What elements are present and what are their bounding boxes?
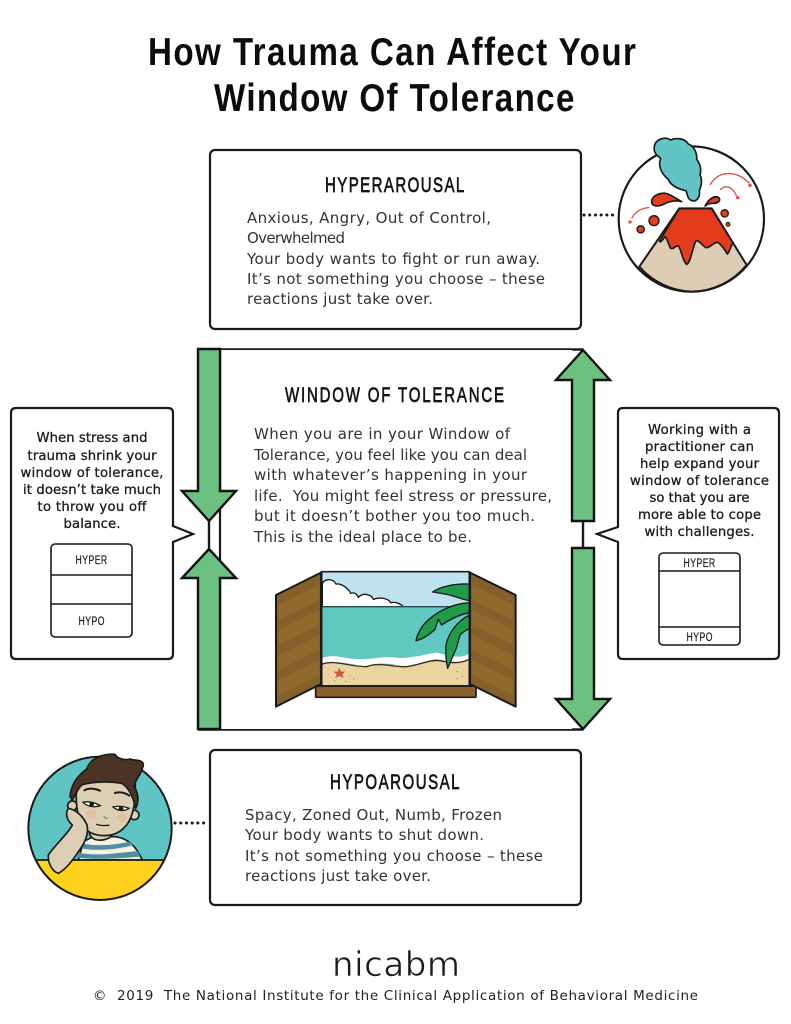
heading: hyperarousal: HYPERAROUSAL — [325, 172, 464, 197]
callout: expand — [597, 408, 779, 659]
illustration: window with beach view — [276, 572, 516, 707]
mini window: narrow — [51, 544, 132, 637]
text: window of tolerance description: life. You might feel stress or pressure, — [254, 487, 552, 505]
text: hypoarousal description: Spacy, Zoned Out, Numb, Frozen — [245, 806, 502, 824]
panel: hypoarousal — [210, 750, 581, 905]
callout: shrink — [11, 408, 193, 659]
heading: hypoarousal: HYPOAROUSAL — [330, 769, 460, 794]
hair — [70, 754, 143, 808]
text: hypoarousal description: reactions just take over. — [245, 867, 431, 885]
text: hyperarousal description: Anxious, Angry, Out of Control, — [247, 209, 491, 227]
text: hyperarousal description: Your body wants to fight or run away. — [246, 250, 540, 268]
volcano mountain — [639, 208, 747, 292]
window sill — [316, 686, 476, 697]
clouds — [322, 580, 403, 607]
sky — [322, 572, 469, 607]
text: hypoarousal description: Your body wants to shut down. — [244, 826, 484, 844]
table — [37, 860, 163, 899]
neck — [89, 830, 113, 840]
callout text: shrink: it doesn’t take much — [23, 483, 161, 498]
surf — [322, 653, 469, 666]
logo: nicabm — [332, 945, 460, 985]
mini window: wide: HYPER — [684, 558, 716, 570]
text: hyperarousal description: reactions just take over. — [247, 290, 433, 308]
arm and hand — [48, 808, 88, 873]
panel: hyperarousal — [210, 150, 581, 329]
panel: window of tolerance — [198, 350, 583, 730]
shirt — [78, 837, 142, 860]
text: hyperarousal description — [246, 209, 545, 308]
title: How Trauma Can Affect Your — [148, 29, 636, 74]
callout text: expand — [630, 423, 769, 540]
volcano lava — [659, 209, 733, 264]
mini window: narrow: HYPER — [76, 555, 108, 567]
starfish — [333, 668, 345, 678]
left shutter — [276, 573, 321, 707]
title — [148, 29, 636, 120]
text: hyperarousal description: It’s not something you choose – these — [247, 270, 545, 288]
text: window of tolerance description: When you are in your Window of — [254, 425, 511, 443]
smoke cloud — [654, 138, 701, 201]
face — [83, 789, 129, 826]
callout text: shrink: When stress and — [36, 431, 148, 446]
callout text: expand: more able to cope — [638, 508, 761, 523]
ears — [68, 801, 77, 810]
callout text: expand: window of tolerance — [630, 474, 769, 489]
text: hypoarousal description — [244, 806, 543, 885]
text: window of tolerance description: with whatever’s happening in your — [254, 466, 528, 484]
callout text: expand: with challenges. — [644, 525, 754, 540]
arrows: shrinking window (left) — [182, 349, 236, 729]
connector: boy to hypoarousal — [175, 822, 209, 824]
callout text: shrink: balance. — [64, 517, 120, 532]
arrows: expanding window (right) — [556, 350, 610, 729]
text: window of tolerance description: This is the ideal place to be. — [253, 528, 472, 546]
icon: volcano — [619, 138, 764, 292]
callout text: expand: practitioner can — [645, 440, 754, 455]
callout text: shrink: to throw you off — [38, 500, 147, 515]
title: Window Of Tolerance — [214, 75, 574, 120]
sea — [322, 607, 469, 665]
callout text: expand: help expand your — [640, 457, 760, 472]
mini window: narrow: HYPO — [78, 616, 104, 628]
head — [76, 778, 135, 836]
text: hypoarousal description: It’s not something you choose – these — [245, 847, 543, 865]
callout text: shrink — [20, 431, 164, 532]
text: hyperarousal description: Overwhelmed — [247, 229, 345, 247]
connector: hyperarousal to volcano — [584, 214, 617, 216]
icon: bored boy — [25, 754, 175, 903]
text: window of tolerance description: Tolerance, you feel like you can deal — [253, 446, 527, 464]
window frame — [322, 572, 469, 686]
lava splashes — [628, 174, 752, 233]
callout text: expand: Working with a — [648, 423, 751, 438]
callout text: shrink: window of tolerance, — [20, 466, 164, 481]
text: window of tolerance description: but it doesn’t bother you too much. — [254, 507, 535, 525]
text: window of tolerance description — [253, 425, 552, 546]
copyright: © 2019 The National Institute for the Clinical Application of Behavioral Medicine — [93, 988, 698, 1004]
right shutter — [470, 573, 516, 707]
callout text: expand: so that you are — [650, 491, 750, 506]
callout text: shrink: trauma shrink your — [28, 449, 157, 464]
heading: window of tolerance: WINDOW OF TOLERANCE — [285, 382, 504, 407]
mini window: wide — [659, 553, 740, 645]
mini window: wide: HYPO — [686, 632, 712, 644]
palm leaves — [416, 584, 469, 668]
sand — [322, 660, 469, 686]
